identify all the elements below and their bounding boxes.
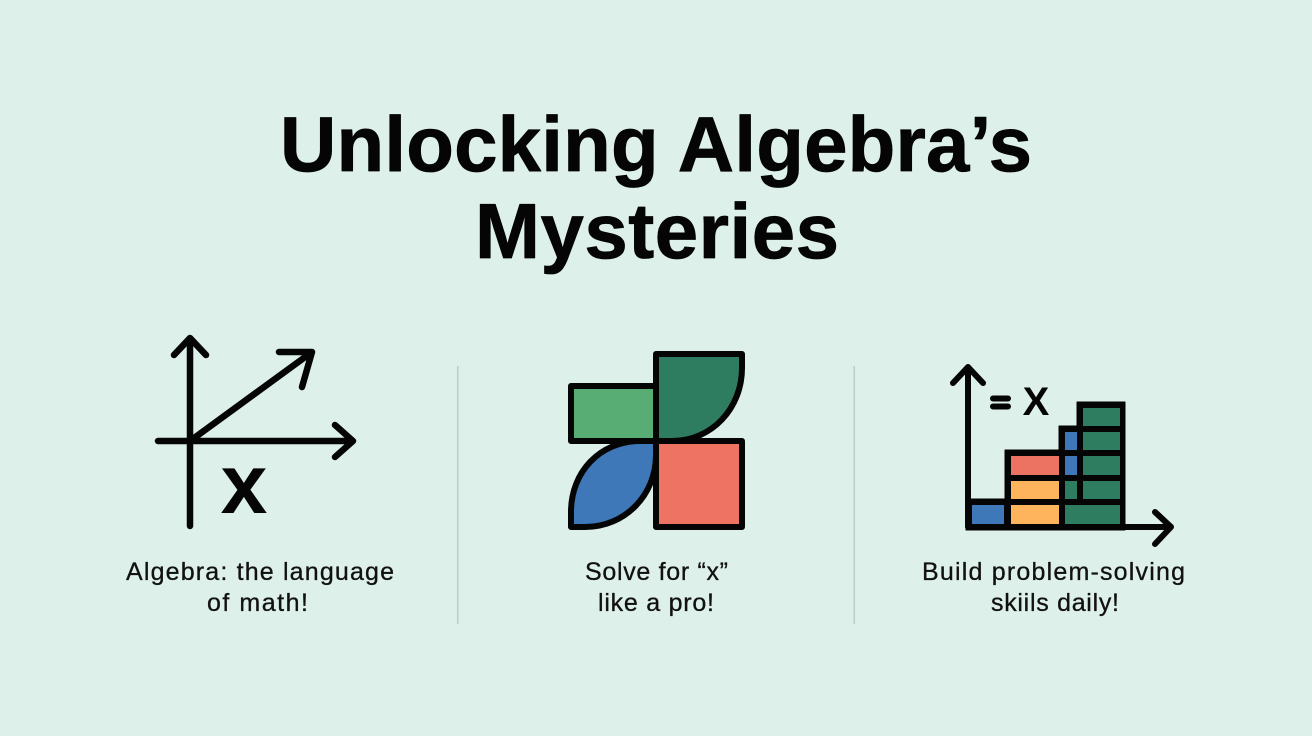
icon: four colored shapes (571, 354, 742, 527)
bars outline (966, 402, 1125, 530)
icon: coordinate axes with arrow and x (158, 338, 353, 531)
caption: algebra language: Algebra: the language (126, 558, 394, 586)
coral square (656, 441, 742, 527)
title (280, 100, 1032, 275)
blue leaf (571, 441, 656, 527)
caption: build skills (922, 558, 1185, 617)
equals x label (993, 380, 1050, 424)
panel: algebra language (126, 338, 394, 617)
axes (953, 367, 1171, 544)
caption: algebra language (126, 558, 394, 617)
caption: solve for x (585, 558, 728, 617)
caption: algebra language: of math! (207, 589, 308, 617)
icon: coordinate axes with arrow and x: x (221, 437, 268, 531)
dark green leaf (656, 354, 742, 441)
icon: stacked bar chart (953, 367, 1171, 544)
equals x label: X (1023, 380, 1050, 424)
title: Unlocking Algebra’s (280, 100, 1032, 188)
caption: solve for x: like a pro! (598, 589, 714, 617)
panel: solve for x (571, 354, 742, 617)
caption: solve for x: Solve for “x” (585, 558, 728, 586)
light green rectangle (571, 386, 656, 441)
panel: build skills (922, 367, 1185, 617)
title: Mysteries (475, 187, 839, 275)
caption: build skills: Build problem-solving (922, 558, 1185, 586)
caption: build skills: skiils daily! (991, 589, 1119, 617)
bar cells (972, 408, 1120, 524)
